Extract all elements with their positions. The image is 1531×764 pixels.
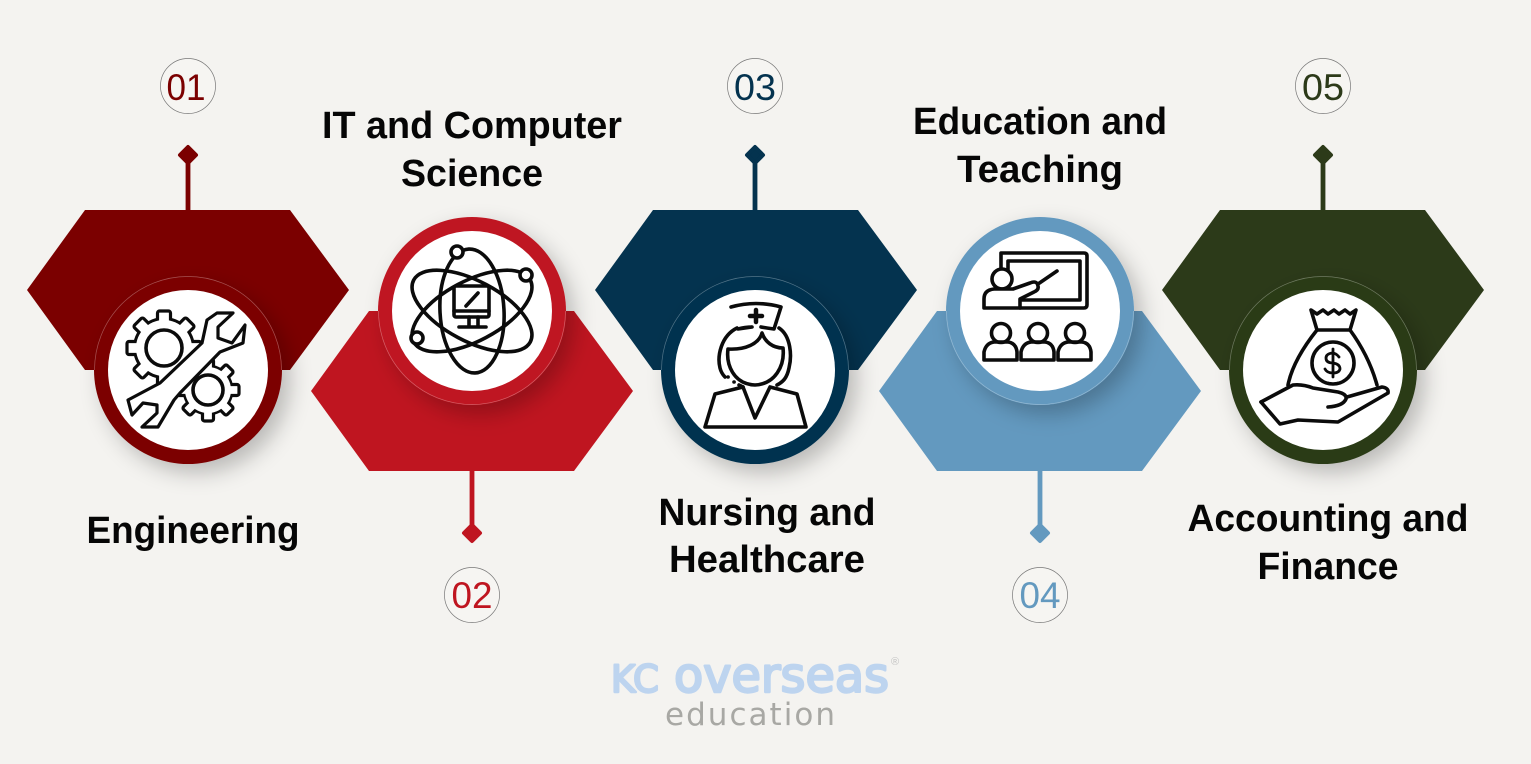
number badge 02: 02 [452,575,492,616]
number badge 04: 04 [1020,575,1060,616]
icon: atom with monitor [400,246,544,375]
icon circle 02 [378,217,566,405]
label: Education and Teaching: Teaching [957,149,1123,191]
connector pin 04 [1032,469,1048,541]
label: IT and Computer Science: Science [401,153,543,195]
icon: gears and wrench [127,311,245,427]
logo: KC overseas education: KC overseas [611,648,889,704]
logo: KC overseas education: education [665,697,835,733]
connector pin 01 [180,147,196,212]
panel: 03 Nursing and Healthcare [595,58,917,581]
hexagon 02 [311,311,633,471]
label: Accounting and Finance [1188,498,1468,588]
connector pin 05 [1315,147,1331,212]
icon: teacher and students [984,253,1091,360]
panel: 05 Accounting and Finance [1162,58,1484,588]
label: Education and Teaching: Education and [913,101,1167,143]
number badge 02 [444,568,500,622]
label: Nursing and Healthcare: Nursing and [658,492,876,534]
logo: KC overseas education [611,648,899,733]
logo: KC overseas education: ® [891,656,899,668]
number badge 01: 01 [166,67,206,108]
icon circle 04 [946,217,1134,405]
icon circle 01 [94,276,282,464]
label: Accounting and Finance: Finance [1258,546,1398,588]
label: Nursing and Healthcare: Healthcare [669,539,865,581]
hexagon 05 [1162,210,1484,370]
connector pin 02 [464,469,480,541]
hexagon 01 [27,210,349,370]
number badge 01 [160,58,216,114]
label: Accounting and Finance: Accounting and [1188,498,1468,540]
label: Nursing and Healthcare [658,492,876,581]
hexagon 03 [595,210,917,370]
number badge 04 [1012,568,1068,622]
panel: 01 Engineering [27,58,349,552]
icon: nurse [705,304,806,427]
icon: money bag on hand [1261,310,1388,424]
label: IT and Computer Science: IT and Computer [322,105,622,147]
number badge 03 [728,58,782,114]
connector pin 03 [747,147,763,212]
panel: 02 IT and Computer Science [311,105,633,622]
icon circle 03 [661,276,849,464]
label: Engineering: Engineering [86,510,300,552]
number badge 05: 05 [1302,67,1344,108]
icon circle 05 [1229,276,1417,464]
number badge 05 [1296,58,1350,114]
panel: 04 Education and Teaching [879,101,1201,622]
label: IT and Computer Science [322,105,622,195]
label: Education and Teaching [913,101,1167,191]
hexagon 04 [879,311,1201,471]
number badge 03: 03 [734,67,776,108]
